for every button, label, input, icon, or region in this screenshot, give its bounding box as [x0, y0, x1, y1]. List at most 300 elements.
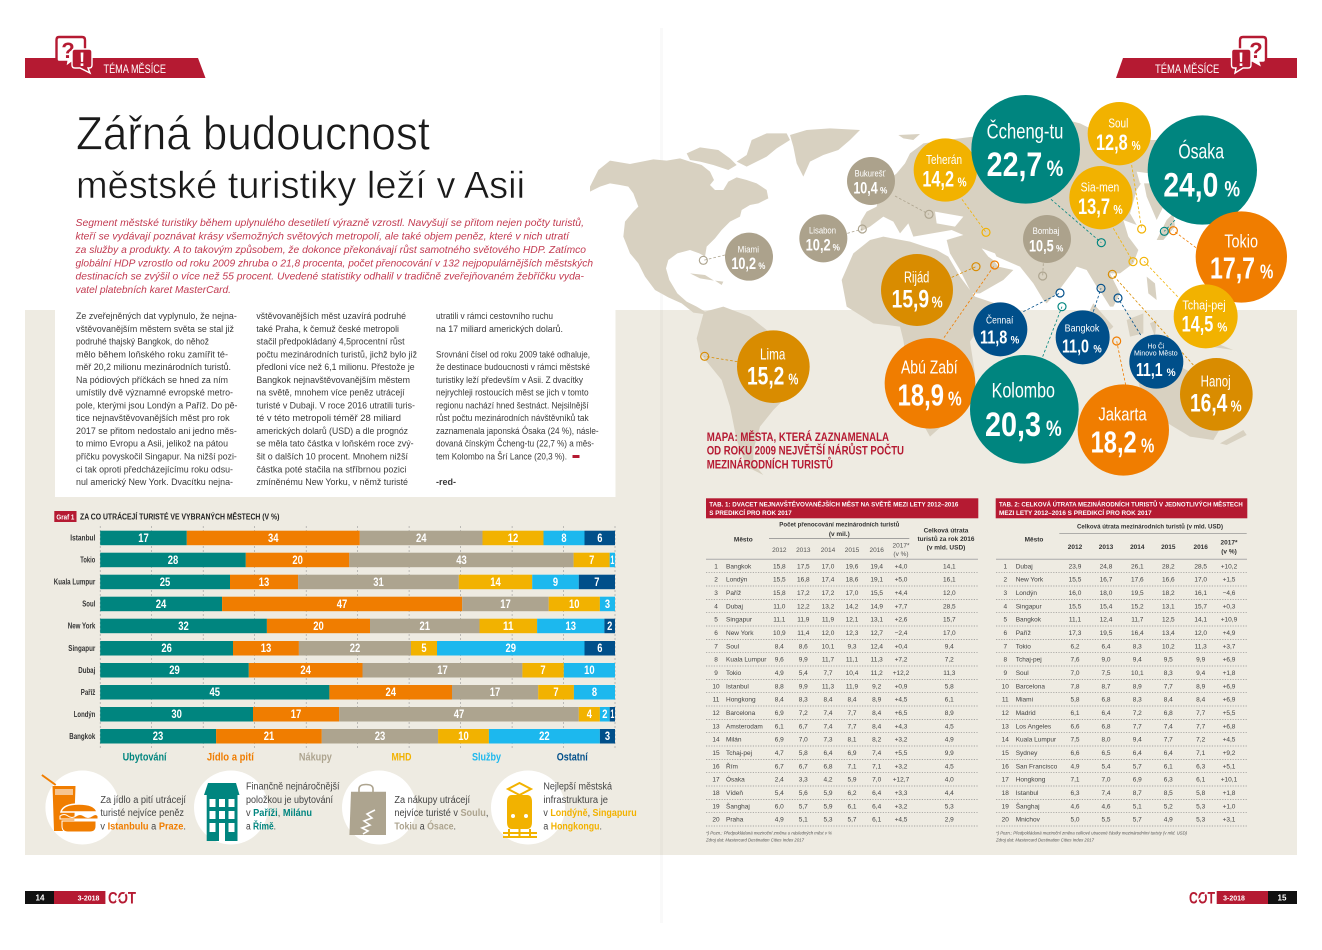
bubble: Soul: %: [1132, 139, 1141, 153]
table 1 rows: 17,0: [943, 630, 956, 637]
table 1 rows: 8,4: [847, 697, 857, 704]
article text column 3: tem Kolombo na Šrí Lance (20,3 %).: [436, 452, 567, 462]
table 1 rows: +5,5: [895, 750, 908, 757]
icon: drink and burger: [42, 775, 98, 832]
table 2 column headers: 2015: [1161, 544, 1176, 551]
article text column 1: mělo během loňského roku zamířit té-: [76, 349, 228, 359]
table 2 rows: 5,3: [1196, 803, 1206, 810]
table 1 heading: [706, 498, 978, 518]
table 2 rows: 13,4: [1162, 630, 1175, 637]
bar: Singapur: 13: [261, 643, 271, 655]
table 1 rows: 6,7: [775, 763, 784, 770]
table 1 rows: +4,5: [895, 817, 908, 824]
table 1 rows: 7,2: [945, 657, 954, 664]
callout: accommodation: položkou je ubytování: [246, 795, 333, 806]
table 2 rows: 20: [1002, 817, 1009, 824]
table 1 rows: 9,6: [775, 657, 784, 664]
bar: Londýn: 47: [454, 709, 464, 721]
table 1 rows: 5,7: [847, 817, 857, 824]
table 2 rows: 19,5: [1100, 630, 1113, 637]
table 1 rows: Barcelona: [726, 710, 756, 717]
table 2 rows: 17,0: [1194, 577, 1207, 584]
table 2 rows: 7,4: [1101, 790, 1111, 797]
bar: Tokio: 7: [589, 555, 594, 567]
table 1 rows: 6,1: [872, 817, 882, 824]
table 1 rows: Tchaj-pej: [726, 750, 752, 757]
article text column 2: se měla tato částka v loňském roce zvý-: [256, 439, 414, 449]
table 1 rows: 19,6: [846, 563, 859, 570]
bubble: Kolombo: 20,3: [985, 406, 1041, 444]
table 2 rows: 7,6: [1070, 657, 1080, 664]
table 1 column headers: 2014: [821, 547, 836, 554]
table 2 rows: 8: [1003, 657, 1007, 664]
table 2 rows: 19,5: [1131, 590, 1144, 597]
bar: Istanbul: 6: [597, 533, 602, 545]
table 2 rows: 8,0: [1101, 737, 1111, 744]
table 1 rows: 5: [714, 617, 718, 624]
table 2 rows: 1: [1003, 563, 1007, 570]
table 2 column headers: 2014: [1130, 544, 1145, 551]
table 2 rows: 4,9: [1164, 817, 1173, 824]
bar: Kuala Lumpur: 31: [373, 577, 384, 589]
table 2 rows: 10,1: [1131, 670, 1144, 677]
table 1 rows: 7,4: [823, 710, 833, 717]
bubble: Miami: 10,2: [731, 254, 756, 273]
table 1 rows: 6,7: [799, 763, 808, 770]
table 2 rows: 11: [1002, 697, 1009, 704]
table 1 rows: 12: [712, 710, 720, 717]
table 2 rows: Singapur: [1016, 603, 1043, 610]
table 1 rows: Řím: [726, 761, 738, 770]
bar: Londýn: 1: [610, 709, 615, 721]
table 2 rows: 8,3: [1133, 697, 1142, 704]
table 1 rows: 9: [714, 670, 718, 677]
table 2 rows: 7,7: [1196, 710, 1206, 717]
bar: Bangkok: 23: [153, 731, 163, 743]
bar: Londýn: 17: [291, 709, 301, 721]
bubble: Bangkok: 11,0: [1062, 336, 1089, 357]
table 2 rows: Miami: [1016, 697, 1033, 704]
table 2 rows: 14: [1002, 737, 1009, 744]
table 1 rows: 10: [712, 683, 720, 690]
table 2 rows: 7,5: [1101, 670, 1111, 677]
table 1 rows: 16,1: [943, 577, 956, 584]
bar: Londýn: 30: [171, 709, 182, 721]
bar: Bangkok: [100, 729, 615, 744]
chart legend: Ostatní: [557, 752, 589, 764]
table 1 rows: 15,5: [870, 590, 883, 597]
table 1 rows: 4,9: [775, 670, 784, 677]
table 1 rows: Šanghaj: [726, 801, 750, 810]
table 1 rows: 19: [712, 803, 720, 810]
table 2 rows: 10: [1002, 683, 1009, 690]
bubble: Teherán: 14,2: [922, 167, 954, 192]
bar: New York: 20: [313, 621, 324, 633]
table 2 rows: 16,6: [1162, 577, 1175, 584]
table 2 rows: 9,0: [1101, 657, 1111, 664]
table 1 rows: 13,2: [822, 603, 835, 610]
footer left: 3-2018: [78, 896, 100, 902]
bubble: Sia-men: 13,7: [1078, 194, 1110, 219]
table 2 rows: 8,3: [1164, 670, 1173, 677]
table 1 rows: 3: [714, 590, 718, 597]
table 1 rows: 11,1: [773, 617, 786, 624]
bubble: Tokio: %: [1260, 261, 1273, 283]
bubble: Bukurešť: Bukurešť: [855, 169, 886, 179]
table 1 rows: +6,5: [895, 710, 908, 717]
table 2 rows: 5,7: [1133, 817, 1142, 824]
table 1 rows: +4,5: [895, 697, 908, 704]
bar: Dubaj: 24: [300, 665, 311, 677]
table 2 rows: 6,2: [1070, 643, 1080, 650]
bar: Bangkok: 23: [375, 731, 385, 743]
bar: Istanbul: 12: [508, 533, 518, 545]
table 2 rows: 7,1: [1196, 750, 1206, 757]
table 2 heading: TAB. 2: CELKOVÁ ÚTRATA MEZINÁRODNÍCH TURISTŮ V JEDNOTLIVÝCH MĚSTECH: [999, 498, 1243, 508]
table 2 rows: 16,7: [1100, 577, 1113, 584]
table 1 rows: 11,3: [822, 683, 834, 690]
bar: Soul: [100, 597, 615, 611]
article text column 2: šit o dalších 10 procent. Mnohem nižší: [256, 452, 408, 462]
map city bubbles: east: [881, 95, 1287, 476]
bubble: Jakarta: %: [1141, 436, 1154, 458]
table 1 rows: 7,4: [872, 750, 882, 757]
table 2 rows: 7,7: [1164, 683, 1173, 690]
bubble: Rijád: Rijád: [904, 270, 929, 287]
callout: transport: a Hongkongu.: [543, 822, 602, 832]
table 2 rows: 28,5: [1194, 563, 1207, 570]
title: Zářná budoucnost: [76, 106, 430, 160]
table 1 rows: 19,1: [870, 577, 883, 584]
table 1 rows: 11,7: [822, 657, 834, 664]
table 2 rows: +4,9: [1223, 630, 1236, 637]
table 1 rows: 16: [712, 763, 720, 770]
table 2 rows: 11,3: [1195, 643, 1207, 650]
table 2 rows: Sydney: [1016, 750, 1038, 757]
bar: Istanbul: 24: [416, 533, 427, 545]
article text column 3: turistiky leží především v Asii. Z dvacítky: [436, 375, 583, 385]
article text column 1: Na pódiových příčkách se hned za ním: [76, 375, 228, 385]
icon: question and exclamation bubbles: [56, 37, 92, 73]
bubble: Bukurešť: 10,4: [853, 178, 878, 197]
icon: tram: [503, 783, 537, 838]
table 1 column headers: Město: [734, 536, 753, 544]
table 2 column headers: (v %): [1221, 548, 1237, 556]
table 1 rows: 12,3: [846, 630, 859, 637]
bubble: Hanoj: [1180, 358, 1253, 431]
table 2 rows: 6,3: [1164, 777, 1173, 784]
table 1 rows: 8,4: [823, 697, 833, 704]
table 2 rows: +6,8: [1223, 723, 1236, 730]
table 2 rows: Šanghaj: [1016, 801, 1040, 810]
map caption: OD ROKU 2009 NEJVĚTŠÍ NÁRŮST POČTU: [707, 442, 904, 458]
table 2 rows: 19: [1002, 803, 1009, 810]
table 2 rows: Mnichov: [1016, 817, 1041, 824]
table 1 rows: +2,6: [895, 617, 908, 624]
city labels: Tokio: [80, 556, 95, 564]
table 2 rows: 26,1: [1131, 563, 1144, 570]
lede paragraph: Segment městské turistiky během uplynulého desetiletí výrazně vzrostl. Navyšují se přitom nejen počty turistů,: [76, 217, 584, 229]
table 1 rows: 12,1: [846, 617, 859, 624]
bubble: Kolombo: Kolombo: [992, 379, 1055, 402]
map caption: MAPA: MĚSTA, KTERÁ ZAZNAMENALA: [707, 429, 889, 444]
table 1 rows: +3,2: [895, 737, 908, 744]
bar: New York: [100, 619, 615, 633]
table 1 rows: 17,5: [797, 563, 810, 570]
table 2: [995, 498, 1247, 844]
bubble: Ósaka: Ósaka: [1178, 140, 1224, 163]
table 2 rows: 4: [1003, 603, 1007, 610]
table 1 rows: 6,9: [775, 737, 784, 744]
table 2 rows: 3: [1003, 590, 1007, 597]
table 1 rows: 15,8: [773, 590, 786, 597]
table 2 rows: 4,6: [1101, 803, 1111, 810]
article text column 1: [76, 311, 238, 487]
table 1 rows: 7,1: [872, 763, 882, 770]
bubble: Bombaj: Bombaj: [1033, 226, 1059, 236]
table 1 rows: Singapur: [726, 617, 753, 624]
table 1 rows: 11,2: [871, 670, 883, 677]
bar: Kuala Lumpur: 7: [594, 577, 600, 589]
bar: Singapur: 6: [597, 643, 602, 655]
bar: Soul: 47: [337, 599, 347, 611]
table 2 rows: 13: [1002, 723, 1009, 730]
table 1 rows: +0,9: [895, 683, 908, 690]
table 2 rows: +6,9: [1223, 657, 1236, 664]
table 2 rows: 7,5: [1070, 737, 1080, 744]
table 1 rows: 5,1: [799, 817, 808, 824]
table 2 rows: San Francisco: [1016, 763, 1058, 770]
table 2 rows: 6,4: [1101, 643, 1111, 650]
table 1 rows: Hongkong: [726, 697, 756, 704]
table 1 rows: 18,6: [846, 577, 859, 584]
table 1 rows: 7,2: [799, 710, 808, 717]
article text column 1: Ze zveřejněných dat vyplynulo, že nejna-: [76, 311, 237, 321]
bubble: Čcheng-tu: Čcheng-tu: [987, 120, 1063, 143]
bar: Soul: 24: [156, 599, 167, 611]
table 1 rows: 10,1: [822, 643, 835, 650]
bubble: Soul: [1088, 102, 1151, 165]
table 1 rows: 6,4: [872, 803, 882, 810]
table 1 rows: 8,1: [847, 737, 857, 744]
table 1 rows: 5,8: [799, 750, 808, 757]
table 2 rows: 5: [1003, 617, 1007, 624]
table 2 rows: 15,5: [1069, 603, 1082, 610]
bar: Bangkok: 3: [605, 731, 610, 743]
table 1 rows: 2: [714, 577, 718, 584]
table 2 rows: 8,4: [1164, 697, 1173, 704]
article text column 1: umístily dvě významné evropské metro-: [76, 388, 233, 398]
table 2 rows: 8,7: [1101, 683, 1111, 690]
callout: shopping: nejvíce turisté v Soulu,: [394, 808, 488, 819]
article text column 3: Srovnání čísel od roku 2009 také odhaluje,: [436, 349, 590, 359]
table 1 rows: +0,4: [895, 643, 908, 650]
bubble: Miami: Miami: [738, 244, 759, 254]
table 2 rows: +6,9: [1223, 697, 1236, 704]
table 2 footnote: *) Pozn.: Předpokládaná meziroční změna celkové utracené částky mezinárodními turisty (v mld. USD): [996, 830, 1187, 836]
city labels: New York: [68, 622, 96, 630]
bar: Soul: 17: [500, 599, 511, 611]
article text column 2: předloni více než 6,1 milionu. Přestože je: [256, 362, 415, 372]
table 1 rows: 11,4: [797, 630, 810, 637]
table 2 rows: 8,5: [1164, 790, 1173, 797]
bubble: Tchaj-pej: %: [1217, 321, 1227, 335]
table 2 rows: 12,0: [1194, 630, 1207, 637]
table 1 rows: 17,2: [797, 590, 810, 597]
table 2 rows: 9,4: [1133, 657, 1142, 664]
table 2 rows: 28,2: [1162, 563, 1175, 570]
table 2 rows: 14,1: [1194, 617, 1207, 624]
lede paragraph: vatel platebních karet MasterCard.: [76, 284, 231, 296]
bar: Paříž: 8: [592, 687, 598, 699]
table 2 rows: 7,0: [1101, 777, 1111, 784]
table 1 rows: 11,0: [773, 603, 786, 610]
table 2 rows: 12,4: [1100, 617, 1113, 624]
table 1 heading: S PREDIKCÍ PRO ROK 2017: [709, 508, 792, 517]
table 2 rows: 9: [1003, 670, 1007, 677]
table 2 rows: 7: [1003, 643, 1007, 650]
bubble: Rijád: [881, 254, 953, 326]
article text column 2: zmíněnému New Yorku, v němž turisté: [256, 477, 408, 487]
table 1 column headers: 2013: [796, 547, 811, 554]
bubble: Tchaj-pej: Tchaj-pej: [1182, 298, 1226, 312]
table 2 footnote: Zdroj dat: Mastercard Destination Cities Index 2017: [995, 838, 1094, 844]
table 2 rows: +0,3: [1223, 603, 1236, 610]
bar: Kuala Lumpur: 9: [553, 577, 558, 589]
table 1 rows: Dubaj: [726, 603, 743, 610]
bar: Tokio: 28: [168, 555, 179, 567]
table 1 rows: 15: [712, 750, 720, 757]
table 2 rows: 5,7: [1133, 763, 1142, 770]
table 2 rows: Bangkok: [1016, 617, 1042, 624]
bubble: Hanoj: Hanoj: [1201, 374, 1231, 391]
bubble: Bombaj: %: [1056, 243, 1064, 253]
table 2 rows: +5,1: [1223, 763, 1236, 770]
article text column 2: na světě, mnohem více peněz utrácejí: [256, 388, 405, 398]
callout: accommodation: a Římě.: [246, 820, 276, 832]
icon: exclamation and question bubbles: [1232, 37, 1266, 73]
table 1 rows: 17: [712, 777, 720, 784]
table 1 rows: 5,9: [847, 777, 857, 784]
article text column 3: na 17 miliard amerických dolarů.: [436, 324, 563, 334]
table 2 column headers: 2016: [1193, 544, 1208, 551]
table 1 rows: 8,2: [872, 737, 882, 744]
table 1 heading: TAB. 1: DVACET NEJNAVŠTĚVOVANĚJŠÍCH MĚST NA SVĚTĚ MEZI LETY 2012–2016: [709, 500, 959, 508]
table 2 rows: 6,5: [1101, 750, 1111, 757]
callout: food: [42, 770, 186, 844]
bubble: Abú Zabí: Abú Zabí: [901, 356, 958, 377]
table 2 rows: 13,1: [1162, 603, 1175, 610]
bubble: Bombaj: 10,5: [1029, 236, 1054, 255]
article text column 2: Bangkok nejnavštěvovanějším městem: [256, 375, 410, 385]
table 1 rows: 19,4: [870, 563, 883, 570]
map connector lines and markers: east: [895, 165, 1196, 385]
bar: Bangkok: 10: [458, 731, 469, 743]
table 1 rows: 5,9: [823, 803, 833, 810]
table 1 column headers: (v %): [893, 551, 909, 558]
bar: Soul: 10: [569, 599, 580, 611]
table 2 rows: +10,1: [1221, 777, 1238, 784]
table 2 rows: 6,3: [1070, 790, 1080, 797]
bubble: Čennaí: [973, 302, 1027, 356]
title: městské turistiky leží v Asii: [76, 165, 525, 207]
article text column 3: že destinace budoucnosti v rámci městské: [436, 362, 590, 372]
table 1 rows: 7,1: [847, 763, 857, 770]
bar: Paříž: 45: [210, 687, 221, 699]
table 2 rows: +10,2: [1221, 563, 1238, 570]
table 2 rows: 9,4: [1133, 737, 1142, 744]
table 2 rows: 16,4: [1131, 630, 1144, 637]
table 2 rows: 4,9: [1070, 763, 1080, 770]
table 2 rows: 5,3: [1196, 817, 1206, 824]
table 1 rows: 7,0: [872, 777, 882, 784]
table 1 rows: 11,9: [822, 617, 834, 624]
table 1 rows: New York: [726, 630, 754, 637]
table 1 column headers: 2016: [869, 547, 884, 554]
table 1 rows: 6,4: [872, 790, 882, 797]
bubble: Hanoj: 16,4: [1190, 390, 1227, 418]
table 1 rows: 4,5: [945, 723, 954, 730]
table 2 rows: 8,9: [1196, 683, 1206, 690]
table 1 rows: 13: [712, 723, 720, 730]
bubble: Lima: Lima: [760, 346, 785, 363]
table 1 column headers: 2017*: [892, 542, 910, 550]
bar: Tokio: [100, 553, 615, 567]
table 1 rows: 4,0: [945, 777, 954, 784]
table 1 rows: +3,2: [895, 803, 908, 810]
table 2 rows: 7,1: [1070, 777, 1080, 784]
article text column 1: měř 20,2 milionu mezinárodních turistů.: [76, 362, 231, 372]
bar: Kuala Lumpur: 25: [160, 577, 171, 589]
bubble: Čcheng-tu: 22,7: [987, 146, 1042, 184]
table 1 rows: 12,0: [822, 630, 835, 637]
table 1 footnote: Zdroj dat: Mastercard Destination Cities Index 2017: [705, 838, 804, 844]
bubble: Lisabon: [799, 214, 847, 262]
icon: question and exclamation bubbles: !: [79, 50, 85, 71]
table 1 rows: 6,4: [823, 750, 833, 757]
header tab right: TÉMA MĚSÍCE: [1155, 61, 1219, 76]
map city bubbles: west: [725, 157, 895, 403]
table 1 rows: 6,7: [799, 723, 808, 730]
table 2 rows: 16,0: [1069, 590, 1082, 597]
bar: Singapur: 26: [161, 643, 172, 655]
bar: Dubaj: 17: [437, 665, 448, 677]
table 1 rows: Vídeň: [726, 790, 743, 797]
table 2 rows: Madrid: [1016, 710, 1036, 717]
article text column 3: -red-: [436, 477, 456, 487]
table 1 rows: 10,9: [773, 630, 786, 637]
bar: Singapur: 22: [350, 643, 360, 655]
table 2 rows: Tokio: [1016, 643, 1031, 650]
bubble: Sia-men: Sia-men: [1081, 181, 1119, 195]
table 1 rows: 6,0: [775, 803, 784, 810]
table 1 rows: 4,2: [823, 777, 833, 784]
table 2 rows: 6,4: [1164, 750, 1173, 757]
bar: Paříž: [100, 685, 615, 700]
table 1 rows: −2,4: [895, 630, 908, 637]
table 2 rows: 7,7: [1164, 737, 1173, 744]
table 1 rows: 9,9: [945, 750, 954, 757]
table 1 rows: 11,1: [846, 657, 858, 664]
table 2 rows: 6,1: [1070, 710, 1080, 717]
table 2 rows: 6,8: [1101, 723, 1111, 730]
table 1 rows: Kuala Lumpur: [726, 657, 767, 664]
table 2 rows: 5,8: [1070, 697, 1080, 704]
bubble: Bukurešť: [847, 157, 895, 205]
table 1 rows: 2,4: [775, 777, 784, 784]
table 2 rows: 5,8: [1196, 790, 1206, 797]
table 2 rows: 15,7: [1194, 603, 1207, 610]
